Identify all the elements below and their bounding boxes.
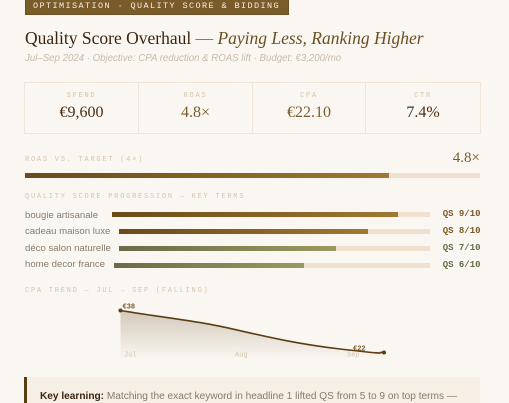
term label 3: déco salon naturelle <box>25 243 111 254</box>
title: Quality Score Overhaul — Paying Less, Ranking Higher <box>25 28 424 48</box>
trend line <box>120 310 384 353</box>
tag banner <box>25 0 289 15</box>
term bar 2 <box>119 229 430 234</box>
term bar 4 <box>114 263 430 268</box>
tag banner: OPTIMISATION · QUALITY SCORE & BIDDING <box>33 1 280 11</box>
term label 2: cadeau maison luxe <box>25 226 110 237</box>
term bar 3 <box>119 246 430 251</box>
KPI: CTR: CTR <box>414 92 432 100</box>
term label 1: bougie artisanale <box>25 210 98 220</box>
start label: €38 <box>122 304 135 312</box>
KPI: spend <box>60 92 104 121</box>
ROAS heading: ROAS VS. TARGET (4×) <box>25 156 144 164</box>
KPI: spend: €9,600 <box>60 104 104 121</box>
month Aug: Aug <box>235 352 248 360</box>
end label: €22 <box>353 346 366 354</box>
term score 1: QS 9/10 <box>443 209 480 219</box>
term score 2: QS 8/10 <box>443 226 480 236</box>
KPI: ROAS: ROAS <box>184 92 207 100</box>
ROAS bar <box>25 173 480 178</box>
month Sep: Sep <box>347 352 360 360</box>
KPI divider 1 <box>138 83 139 133</box>
subtitle: Jul–Sep 2024 · Objective: CPA reduction & ROAS lift · Budget: €3,200/mo <box>25 53 341 64</box>
KPI: CPA <box>287 92 331 121</box>
callout: key learning: Key learning: Matching the exact keyword in headline 1 lifted QS from 5 to 9 on top terms — <box>40 391 457 402</box>
KPI divider 2 <box>252 83 253 133</box>
term label 4: home decor france <box>25 259 105 270</box>
KPI divider 3 <box>365 83 366 133</box>
ROAS value: 4.8× <box>453 150 480 166</box>
area fill <box>120 310 384 360</box>
KPI: CPA: €22.10 <box>287 104 331 121</box>
KPI: CTR: 7.4% <box>406 104 440 121</box>
KPI: CPA: CPA <box>300 92 318 100</box>
KPI: CTR <box>406 92 440 121</box>
CPA line chart <box>118 304 386 360</box>
KPI: spend: SPEND <box>67 92 96 100</box>
term score 3: QS 7/10 <box>443 242 480 252</box>
term bar 1 <box>112 212 430 217</box>
term score 4: QS 6/10 <box>443 260 480 270</box>
CPA heading: CPA TREND — JUL → SEP (FALLING) <box>25 287 209 295</box>
callout: key learning <box>24 377 480 403</box>
start point <box>118 308 122 312</box>
KPI panel <box>24 82 481 134</box>
end point <box>382 350 386 354</box>
QS heading: QUALITY SCORE PROGRESSION — KEY TERMS <box>25 193 245 201</box>
KPI: ROAS <box>181 92 210 121</box>
month Jul: Jul <box>124 352 137 360</box>
KPI: ROAS: 4.8× <box>181 104 210 121</box>
